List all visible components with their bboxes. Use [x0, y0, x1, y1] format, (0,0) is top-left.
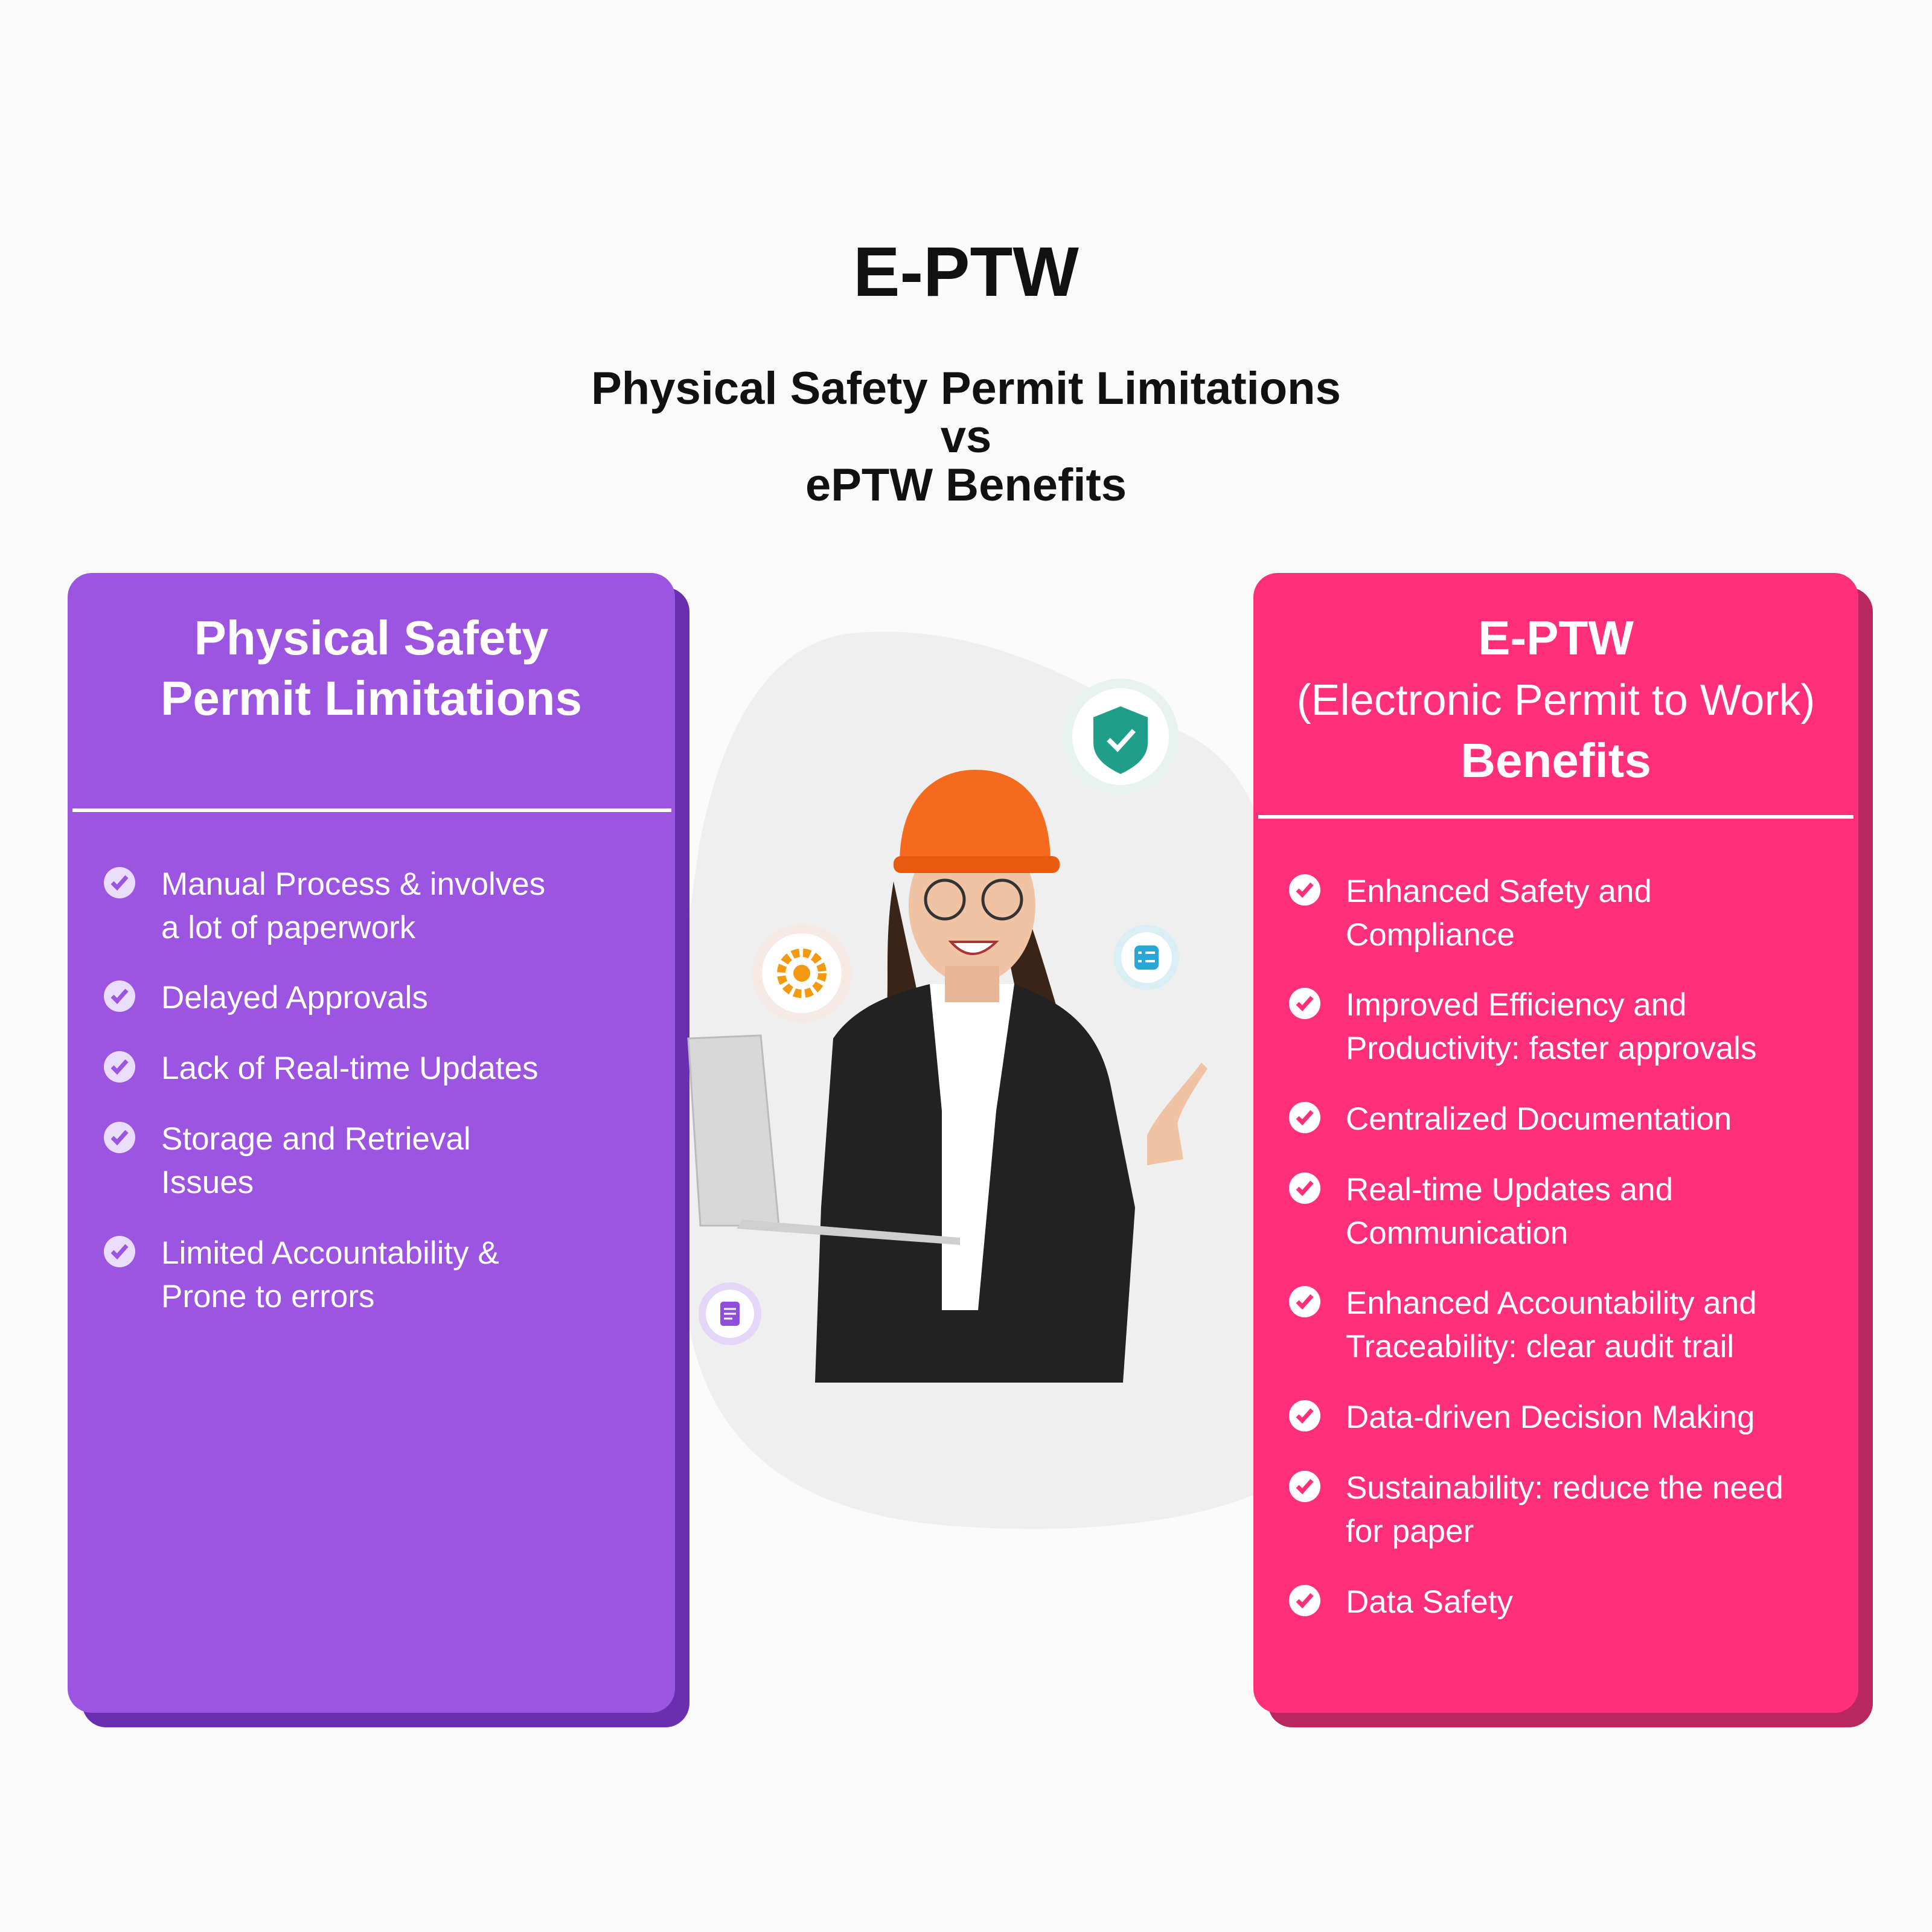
list: limitations: a lot of paperwork — [161, 910, 415, 945]
list: benefits: for paper — [1346, 1514, 1474, 1549]
list: benefits: Compliance — [1346, 917, 1515, 953]
subtitle — [591, 363, 1341, 511]
list: limitations: Manual Process & involves — [161, 866, 545, 902]
heading: E-PTW — [1478, 611, 1634, 665]
list: benefits: Data-driven Decision Making — [1346, 1399, 1755, 1435]
icon: shield — [1063, 679, 1179, 795]
list: benefits: Enhanced Accountability and — [1346, 1285, 1757, 1321]
list: benefits: Improved Efficiency and — [1346, 987, 1687, 1023]
icon: document — [699, 1282, 761, 1345]
icon: checklist — [1114, 925, 1179, 990]
heading: Physical Safety — [194, 611, 548, 665]
background blob — [689, 632, 1253, 1529]
list: limitations: Delayed Approvals — [161, 980, 428, 1016]
heading: Benefits — [1460, 734, 1651, 787]
list: limitations: Storage and Retrieval — [161, 1121, 471, 1157]
heading: (Electronic Permit to Work) — [1297, 676, 1815, 724]
heading: Permit Limitations — [161, 671, 582, 725]
list: benefits: Communication — [1346, 1215, 1568, 1251]
list: limitations: Lack of Real-time Updates — [161, 1051, 539, 1086]
list: benefits: Sustainability: reduce the need — [1346, 1470, 1783, 1506]
list: benefits: Productivity: faster approvals — [1346, 1031, 1756, 1066]
list: benefits: Real-time Updates and — [1346, 1172, 1673, 1208]
list: benefits: Traceability: clear audit trail — [1346, 1329, 1734, 1364]
panel: left shadow — [82, 587, 689, 1727]
list: benefits: Centralized Documentation — [1346, 1101, 1732, 1137]
illustration: worker with laptop — [687, 770, 1208, 1383]
subtitle: Physical Safety Permit Limitations — [591, 363, 1341, 414]
list: limitations: Issues — [161, 1165, 254, 1200]
subtitle: vs — [941, 411, 991, 462]
subtitle: ePTW Benefits — [805, 459, 1127, 511]
list: benefits: Data Safety — [1346, 1584, 1513, 1620]
panel: limitations — [68, 573, 675, 1713]
title: E-PTW — [853, 232, 1079, 311]
list: limitations: Limited Accountability & — [161, 1235, 499, 1271]
panel: right shadow — [1268, 587, 1873, 1727]
heading — [161, 611, 582, 725]
heading — [1297, 611, 1815, 787]
list: limitations: Prone to errors — [161, 1279, 374, 1314]
list: benefits: Enhanced Safety and — [1346, 874, 1652, 909]
panel: benefits — [1253, 573, 1858, 1713]
icon: gear — [752, 924, 851, 1023]
